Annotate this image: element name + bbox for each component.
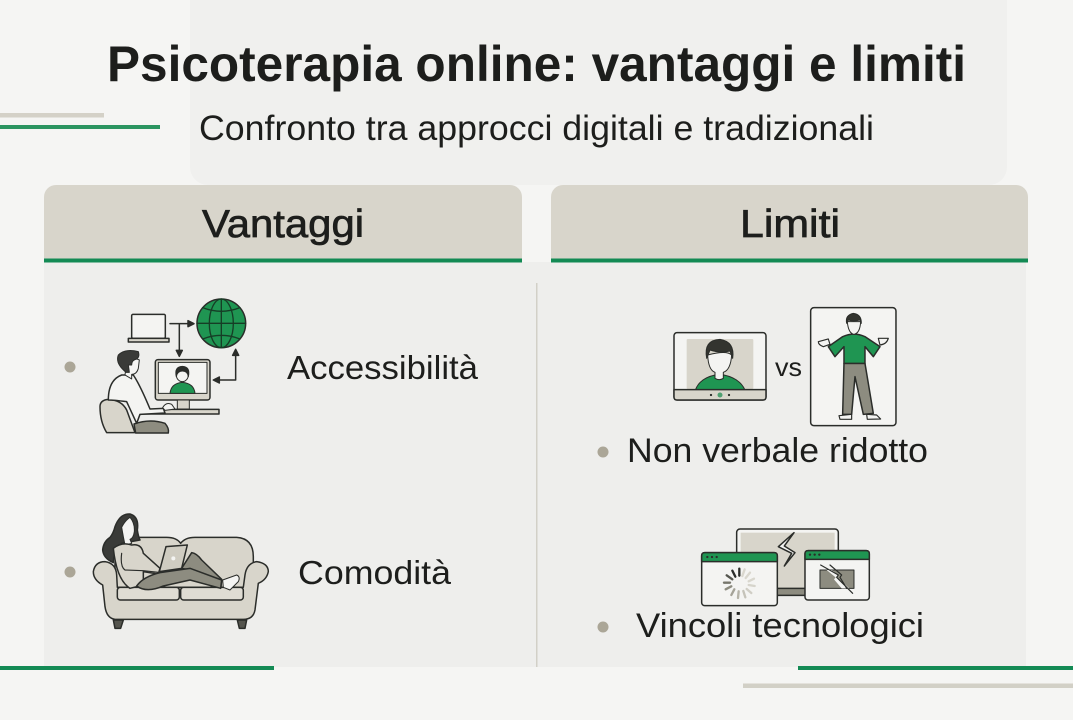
item: Non verbale ridotto: Non verbale ridotto [627, 432, 928, 470]
icon: person on video call with globe [100, 299, 246, 433]
item: Vincoli tecnologici: Vincoli tecnologici [636, 607, 924, 645]
item: Accessibilità: Accessibilità [287, 349, 479, 386]
subtitle: Confronto tra approcci digitali e tradizionali [199, 109, 874, 148]
item: Comodità [64, 514, 452, 628]
item: Comodità: Comodità [298, 554, 452, 591]
panel header: Vantaggi [44, 185, 522, 262]
item: Non verbale ridotto: vs [775, 352, 802, 382]
panel header: Limiti: Limiti [740, 203, 840, 246]
icon: woman with laptop on sofa [93, 514, 268, 628]
item: Non verbale ridotto [598, 308, 928, 470]
item: Accessibilità [64, 299, 479, 433]
icon: broken laptop and failing browser windows [702, 529, 869, 606]
panel header: Vantaggi: Vantaggi [202, 203, 364, 246]
panel header: Limiti [551, 185, 1028, 262]
item: Vincoli tecnologici [598, 529, 924, 645]
title: Psicoterapia online: vantaggi e limiti [107, 35, 966, 92]
icon: video call versus in-person figure [674, 308, 896, 426]
